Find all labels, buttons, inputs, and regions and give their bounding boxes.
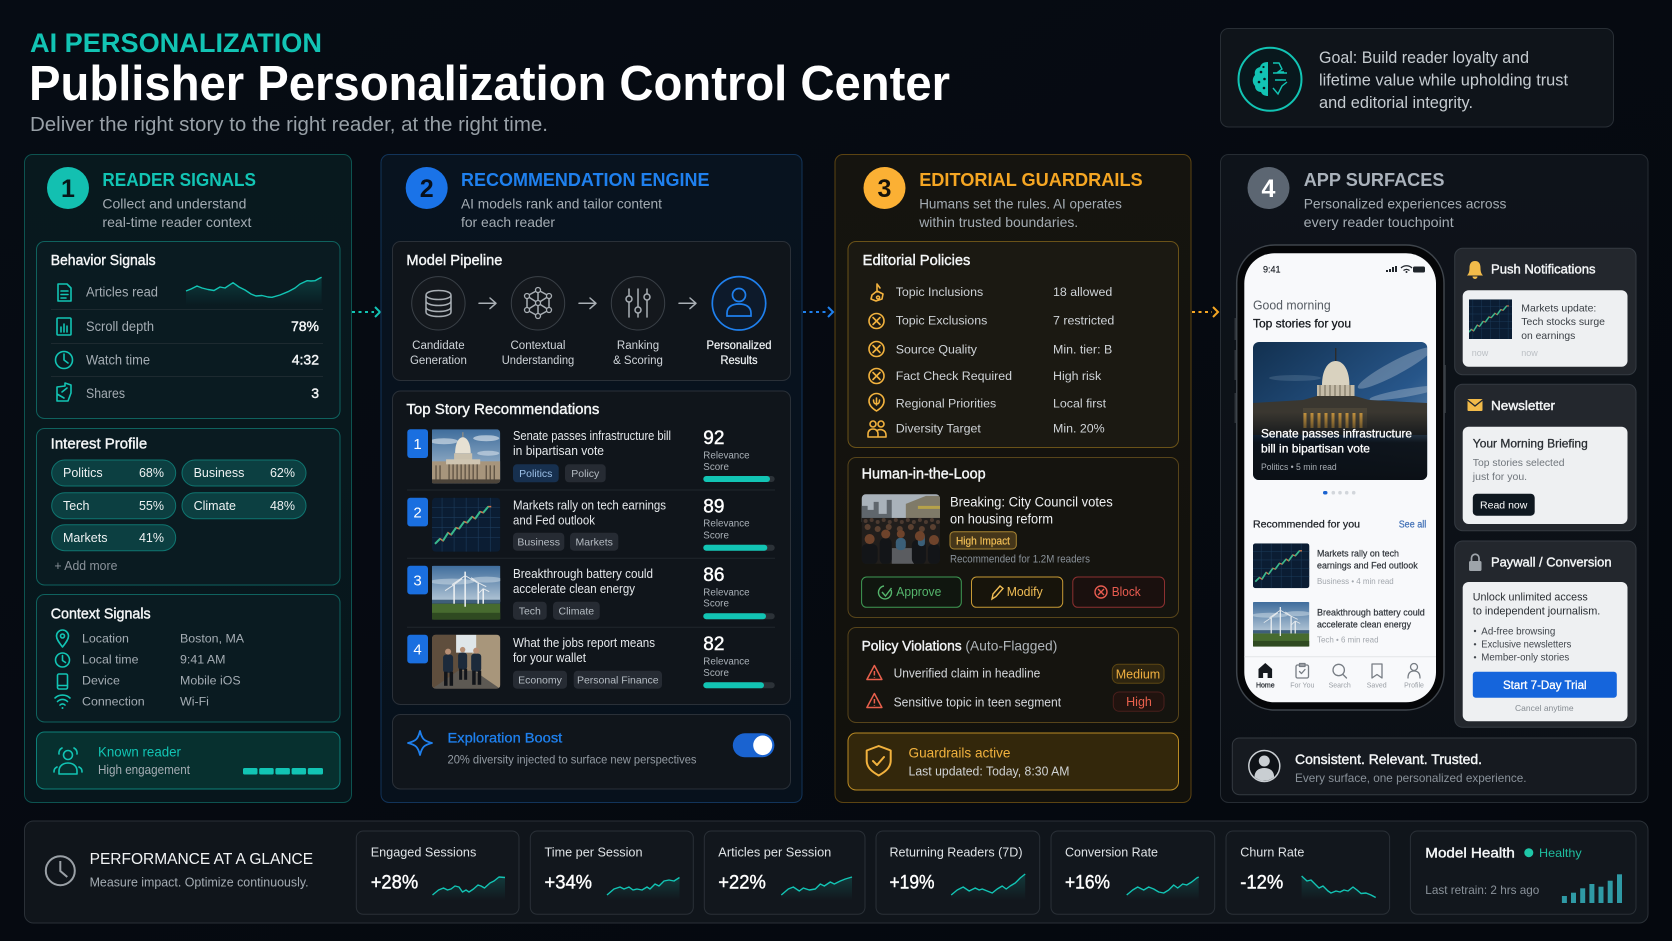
heading: READER SIGNALS xyxy=(102,169,256,190)
card: paywall conversion: Paywall / Conversion xyxy=(1491,555,1612,570)
notification preview: now xyxy=(1472,348,1489,358)
row: shares: 3 xyxy=(311,385,319,401)
hero story card: bill in bipartisan vote xyxy=(1261,441,1370,455)
violation: unverified claim: Medium xyxy=(1116,667,1160,681)
story 2: Score xyxy=(703,530,729,541)
button: start trial xyxy=(1473,672,1617,698)
kpi: time per session xyxy=(530,831,693,914)
step badge 4: 4 xyxy=(1262,175,1276,203)
row: watch time: 4:32 xyxy=(292,352,319,368)
nav: home: Home xyxy=(1256,682,1275,689)
story 4: for your wallet xyxy=(513,651,586,665)
row: device: Mobile iOS xyxy=(180,673,241,687)
pill: climate: Climate xyxy=(194,499,236,513)
story 2: 89 xyxy=(703,496,724,517)
story 4: Score xyxy=(703,668,729,679)
goal text: and editorial integrity. xyxy=(1319,94,1473,112)
button: read now xyxy=(1473,494,1535,516)
pill: markets: Markets xyxy=(63,531,107,545)
card: interest profile xyxy=(36,428,340,585)
story headline: on housing reform xyxy=(950,511,1053,526)
card: human in the loop: Recommended for 1.2M readers xyxy=(950,554,1090,566)
story 4: Relevance xyxy=(703,656,750,667)
card: exploration boost: 20% diversity injected to surface new perspectives xyxy=(448,752,696,766)
button: read now: Read now xyxy=(1480,499,1528,511)
description xyxy=(102,196,252,230)
kpi: conversion rate: Conversion Rate xyxy=(1065,845,1158,860)
story 4: Personal Finance xyxy=(577,674,659,686)
description: every reader touchpoint xyxy=(1304,214,1454,230)
row: diversity target: Min. 20% xyxy=(1053,422,1105,436)
phone story 1 xyxy=(1253,543,1418,588)
newsletter preview xyxy=(1463,427,1628,524)
card: known reader: Known reader xyxy=(98,744,181,760)
notification preview: now xyxy=(1521,348,1538,358)
hero story card: Politics • 5 min read xyxy=(1261,462,1337,472)
violation: sensitive topic: Sensitive topic in teen segment xyxy=(894,694,1061,709)
card: behavior signals xyxy=(36,242,340,418)
engagement meter xyxy=(243,768,323,774)
status bar xyxy=(1263,264,1425,274)
step badge 4 xyxy=(1248,167,1290,209)
phone mockup: Recommended for you xyxy=(1253,518,1360,530)
row: topic inclusions: Topic Inclusions xyxy=(896,285,983,299)
icon: person xyxy=(1249,750,1280,782)
step badge 3 xyxy=(864,167,906,209)
arrow xyxy=(579,298,596,309)
row: scroll depth xyxy=(57,318,319,335)
story 3: Breakthrough battery could xyxy=(513,567,653,581)
button: block: Block xyxy=(1112,584,1141,599)
nav: search: Search xyxy=(1329,682,1351,689)
row: topic inclusions xyxy=(871,284,1112,301)
row: source quality xyxy=(869,342,1112,356)
card: human in the loop: Human-in-the-Loop xyxy=(862,467,986,483)
step: ranking and scoring: & Scoring xyxy=(613,355,663,367)
kpi: returning readers xyxy=(876,831,1040,914)
story headline: Breaking: City Council votes xyxy=(950,495,1113,510)
story 1: Score xyxy=(703,462,729,473)
row: device: Device xyxy=(82,673,120,687)
card: model pipeline: Model Pipeline xyxy=(406,253,502,269)
row: fact check required: High risk xyxy=(1053,369,1102,383)
toggle switch xyxy=(733,733,774,757)
eyebrow: AI PERSONALIZATION xyxy=(30,28,322,58)
card: context signals xyxy=(36,594,340,722)
newsletter preview: Top stories selected xyxy=(1473,457,1565,469)
notification preview xyxy=(1463,290,1628,367)
story 4: 4 xyxy=(413,642,422,658)
step badge 2 xyxy=(406,167,448,209)
paywall preview: to independent journalism. xyxy=(1473,606,1600,618)
heading: APP SURFACES xyxy=(1304,169,1444,190)
performance heading: PERFORMANCE AT A GLANCE xyxy=(90,851,313,868)
button: approve xyxy=(862,577,961,607)
kpi: returning readers: +19% xyxy=(890,873,935,894)
step: ranking and scoring xyxy=(611,277,665,367)
violation: sensitive topic xyxy=(867,692,1164,711)
description: Humans set the rules. AI operates xyxy=(919,196,1122,212)
story 3: Climate xyxy=(559,605,594,617)
story 2 xyxy=(407,496,775,552)
story 1 xyxy=(407,428,775,483)
row: diversity target xyxy=(868,421,1105,437)
card: policy violations: Policy Violations (Auto-Flagged) xyxy=(862,638,1057,654)
banner: consistent relevant trusted: Consistent. Relevant. Trusted. xyxy=(1295,751,1482,767)
row: topic inclusions: 18 allowed xyxy=(1053,285,1112,299)
story 1: Politics xyxy=(519,468,552,480)
step: ranking and scoring: Ranking xyxy=(617,340,659,352)
violation: sensitive topic: High xyxy=(1126,695,1152,709)
nav: saved xyxy=(1367,664,1387,689)
description: within trusted boundaries. xyxy=(918,214,1078,230)
phone mockup: See all xyxy=(1399,519,1426,530)
story 4 xyxy=(407,634,775,689)
phone story 2: Tech • 6 min read xyxy=(1317,635,1379,645)
pill: climate xyxy=(182,493,306,519)
pill: business: 62% xyxy=(270,466,295,480)
card: known reader: High engagement xyxy=(98,763,190,777)
button: block xyxy=(1073,577,1164,607)
row: diversity target: Diversity Target xyxy=(896,422,981,436)
card: model health: Last retrain: 2 hrs ago xyxy=(1425,883,1540,897)
pill: markets: 41% xyxy=(139,531,164,545)
row: location: Boston, MA xyxy=(180,632,245,646)
pill: climate: 48% xyxy=(270,499,295,513)
phone mockup: Good morning xyxy=(1253,297,1331,312)
row: topic exclusions: 7 restricted xyxy=(1053,314,1114,328)
newsletter preview: just for you. xyxy=(1472,471,1527,483)
kpi: articles per session: Articles per Session xyxy=(718,845,831,860)
step badge 2: 2 xyxy=(420,175,434,203)
header: eyebrow, title and tagline xyxy=(29,28,950,136)
arrow: engine to guardrails xyxy=(803,307,833,317)
story 4: 82 xyxy=(703,634,724,655)
card: paywall conversion xyxy=(1455,541,1636,727)
nav: for you xyxy=(1290,664,1314,689)
phone story 2: accelerate clean energy xyxy=(1317,619,1411,629)
step badge 1 xyxy=(47,167,89,209)
arrow: signals to engine xyxy=(352,307,380,317)
goal text: lifetime value while upholding trust xyxy=(1319,72,1568,90)
violation: unverified claim xyxy=(867,664,1164,683)
card: context signals: Context Signals xyxy=(51,606,151,622)
card: newsletter xyxy=(1455,384,1636,531)
nav: profile: Profile xyxy=(1404,682,1424,689)
pill: business: Business xyxy=(194,466,244,480)
kpi: churn rate xyxy=(1226,831,1390,914)
arrow xyxy=(679,298,696,309)
kpi: conversion rate: +16% xyxy=(1065,873,1110,894)
card: behavior signals: Behavior Signals xyxy=(51,253,156,269)
arrow xyxy=(479,298,496,309)
story headline xyxy=(950,495,1113,526)
pill: business xyxy=(182,460,306,486)
nav: home xyxy=(1256,663,1275,689)
row: topic exclusions xyxy=(869,314,1114,328)
card: editorial policies xyxy=(848,242,1178,448)
paywall preview: Ad-free browsing xyxy=(1481,626,1555,637)
button: start trial: Start 7-Day Trial xyxy=(1503,678,1587,692)
banner: consistent relevant trusted: Every surface, one personalized experience. xyxy=(1295,771,1526,785)
row: fact check required xyxy=(869,368,1102,384)
row: source quality: Source Quality xyxy=(896,342,978,356)
icon: envelope xyxy=(1468,399,1482,411)
row: watch time: Watch time xyxy=(86,353,150,368)
button: approve: Approve xyxy=(896,584,941,599)
pill: tech: 55% xyxy=(139,499,164,513)
phone story 1: Business • 4 min read xyxy=(1317,576,1394,586)
icon: lock xyxy=(1469,554,1482,571)
nav: saved: Saved xyxy=(1367,682,1387,689)
newsletter preview: Your Morning Briefing xyxy=(1473,436,1588,450)
description: AI models rank and tailor content xyxy=(461,196,662,212)
story 1: 1 xyxy=(413,436,422,453)
story 2: Business xyxy=(517,536,560,548)
row: location xyxy=(56,630,245,647)
bottom navigation xyxy=(1256,663,1424,689)
row: regional priorities: Regional Priorities xyxy=(896,396,996,410)
story 1: Policy xyxy=(571,468,600,480)
kpi: churn rate: -12% xyxy=(1240,873,1283,894)
story 1: Relevance xyxy=(703,450,750,461)
step: contextual understanding xyxy=(502,277,574,367)
card: editorial policies: Editorial Policies xyxy=(863,253,970,269)
kpi: conversion rate xyxy=(1051,831,1215,914)
carousel dots xyxy=(1323,491,1355,495)
story 1: in bipartisan vote xyxy=(513,444,604,458)
card: known reader xyxy=(36,732,340,789)
banner: consistent relevant trusted xyxy=(1232,738,1636,795)
step: personalized results: Personalized xyxy=(706,338,772,352)
row: watch time xyxy=(56,352,319,368)
button: modify: Modify xyxy=(1007,584,1043,599)
row: regional priorities xyxy=(869,394,1107,411)
step: candidate generation: Generation xyxy=(410,355,467,367)
kpi: articles per session: +22% xyxy=(718,873,766,894)
status bar: 9:41 xyxy=(1263,264,1281,274)
phone story 1: Markets rally on tech xyxy=(1317,549,1399,559)
card: model pipeline xyxy=(392,242,790,380)
row: scroll depth: Scroll depth xyxy=(86,319,154,334)
story 4: Economy xyxy=(518,674,563,686)
description: for each reader xyxy=(461,214,555,230)
phone story 2: Breakthrough battery could xyxy=(1317,607,1425,617)
story 1: 92 xyxy=(703,428,724,449)
row: shares: Shares xyxy=(86,386,125,401)
row: connection: Connection xyxy=(82,694,145,708)
add more link: + Add more xyxy=(54,559,117,573)
icon: sparkle xyxy=(408,731,432,755)
story 3: accelerate clean energy xyxy=(513,582,636,596)
card: push notifications: Push Notifications xyxy=(1491,261,1596,276)
goal text xyxy=(1319,49,1568,112)
description xyxy=(918,196,1122,230)
step badge 1: 1 xyxy=(61,175,75,203)
notification preview: Markets update: xyxy=(1521,303,1596,315)
title: Publisher Personalization Control Center xyxy=(29,57,950,111)
bar chart: model health xyxy=(1562,874,1622,903)
goal callout xyxy=(1220,28,1614,127)
kpi: returning readers: Returning Readers (7D) xyxy=(890,845,1022,860)
phone mockup xyxy=(1234,245,1446,710)
nav: for you: For You xyxy=(1290,682,1314,689)
story 3: Tech xyxy=(519,605,541,617)
story 2: Markets xyxy=(576,536,613,548)
row: source quality: Min. tier: B xyxy=(1053,342,1112,356)
button: modify xyxy=(972,577,1063,607)
row: local time: Local time xyxy=(82,652,139,666)
card: push notifications xyxy=(1455,248,1636,375)
story 1: Senate passes infrastructure bill xyxy=(513,429,671,443)
nav: search xyxy=(1329,664,1351,689)
card: guardrails active xyxy=(848,733,1178,790)
story 3: 3 xyxy=(413,572,422,590)
pill: politics: Politics xyxy=(63,466,103,480)
step: candidate generation: Candidate xyxy=(412,340,465,352)
kpi: engaged sessions xyxy=(356,831,519,914)
pill: tech xyxy=(52,493,176,519)
row: connection: Wi-Fi xyxy=(180,694,209,708)
icon: brain xyxy=(1238,48,1302,111)
card: model health xyxy=(1410,831,1636,914)
row: local time: 9:41 AM xyxy=(180,652,225,666)
card: guardrails active: Guardrails active xyxy=(908,744,1011,760)
performance bar xyxy=(24,821,1648,923)
panel: reader signals xyxy=(24,154,352,802)
row: connection xyxy=(55,694,209,709)
story 2: Markets rally on tech earnings xyxy=(513,498,666,512)
story 3 xyxy=(407,565,775,620)
description xyxy=(1304,196,1506,230)
story 2: 2 xyxy=(413,504,422,522)
row: regional priorities: Local first xyxy=(1053,396,1107,410)
panel: app surfaces xyxy=(1220,154,1648,802)
heading: EDITORIAL GUARDRAILS xyxy=(919,169,1143,190)
pill: tech: Tech xyxy=(63,499,89,513)
pill: markets xyxy=(52,525,176,551)
row: articles read xyxy=(58,277,322,305)
story 3: Relevance xyxy=(703,587,750,598)
row: device xyxy=(58,673,241,689)
description: Collect and understand xyxy=(102,196,246,212)
phone mockup: Top stories for you xyxy=(1253,317,1351,331)
kpi: engaged sessions: +28% xyxy=(371,873,418,894)
paywall preview: Exclusive newsletters xyxy=(1481,640,1571,651)
row: local time xyxy=(56,652,225,667)
icon: clock xyxy=(46,856,75,885)
kpi: articles per session xyxy=(704,831,865,914)
photo: crowd xyxy=(862,494,940,564)
step: personalized results: Results xyxy=(720,353,758,367)
card: model health: Model Health xyxy=(1425,844,1515,860)
phone story 2 xyxy=(1251,602,1425,647)
icon: bell xyxy=(1467,261,1483,279)
step: contextual understanding: Contextual xyxy=(511,340,565,352)
description: real-time reader context xyxy=(102,214,252,230)
step badge 3: 3 xyxy=(878,175,891,203)
status: healthy: Healthy xyxy=(1539,846,1582,860)
card: exploration boost: Exploration Boost xyxy=(448,729,562,745)
nav: profile xyxy=(1404,664,1424,689)
pill: politics xyxy=(52,460,176,486)
panel: recommendation engine xyxy=(381,154,802,802)
tagline: Deliver the right story to the right reader, at the right time. xyxy=(30,114,548,136)
description: Personalized experiences across xyxy=(1304,196,1506,212)
card: top story recommendations: Top Story Recommendations xyxy=(406,402,599,418)
goal text: Goal: Build reader loyalty and xyxy=(1319,49,1529,67)
phone story 1: earnings and Fed outlook xyxy=(1317,561,1418,571)
step: personalized results xyxy=(706,277,772,367)
description xyxy=(461,196,662,230)
paywall preview: Member-only stories xyxy=(1481,653,1569,664)
card: human in the loop xyxy=(848,458,1178,618)
icon: shield xyxy=(867,746,891,776)
notification preview: Tech stocks surge xyxy=(1521,316,1605,328)
step: candidate generation xyxy=(410,277,467,367)
story 3: 86 xyxy=(703,565,724,586)
badge: high impact: High Impact xyxy=(956,535,1010,547)
card: interest profile: Interest Profile xyxy=(51,436,147,452)
row: location: Location xyxy=(82,632,129,646)
icon: reader xyxy=(54,748,82,774)
card: policy violations xyxy=(848,628,1178,722)
hero story card xyxy=(1253,342,1441,480)
badge: high impact xyxy=(950,532,1016,549)
panel: editorial guardrails xyxy=(835,154,1191,802)
kpi: time per session: Time per Session xyxy=(544,845,642,860)
card: exploration boost xyxy=(392,714,790,789)
card: top story recommendations xyxy=(392,391,790,704)
violation: unverified claim: Unverified claim in headline xyxy=(894,666,1040,681)
row: fact check required: Fact Check Required xyxy=(896,369,1012,383)
story 3: Score xyxy=(703,599,729,610)
paywall preview: Unlock unlimited access xyxy=(1473,592,1588,604)
heading: RECOMMENDATION ENGINE xyxy=(461,169,710,190)
story 2: Relevance xyxy=(703,519,750,530)
step: contextual understanding: Understanding xyxy=(502,355,574,367)
row: articles read: Articles read xyxy=(86,285,158,300)
card: newsletter: Newsletter xyxy=(1491,398,1556,413)
notification preview: on earnings xyxy=(1521,330,1575,342)
paywall preview: Cancel anytime xyxy=(1515,703,1574,713)
performance bar: Measure impact. Optimize continuously. xyxy=(90,876,309,890)
arrow: guardrails to surfaces xyxy=(1192,307,1218,317)
kpi: churn rate: Churn Rate xyxy=(1240,845,1304,860)
row: shares xyxy=(57,383,319,401)
kpi: engaged sessions: Engaged Sessions xyxy=(371,845,477,860)
card: guardrails active: Last updated: Today, 8:30 AM xyxy=(908,764,1070,778)
row: scroll depth: 78% xyxy=(291,318,319,334)
story 2: and Fed outlook xyxy=(513,513,596,527)
paywall preview xyxy=(1463,582,1628,721)
story 4: What the jobs report means xyxy=(513,636,655,650)
kpi: time per session: +34% xyxy=(544,873,592,894)
pill: politics: 68% xyxy=(139,466,164,480)
row: topic exclusions: Topic Exclusions xyxy=(896,314,987,328)
hero story card: Senate passes infrastructure xyxy=(1261,426,1412,440)
